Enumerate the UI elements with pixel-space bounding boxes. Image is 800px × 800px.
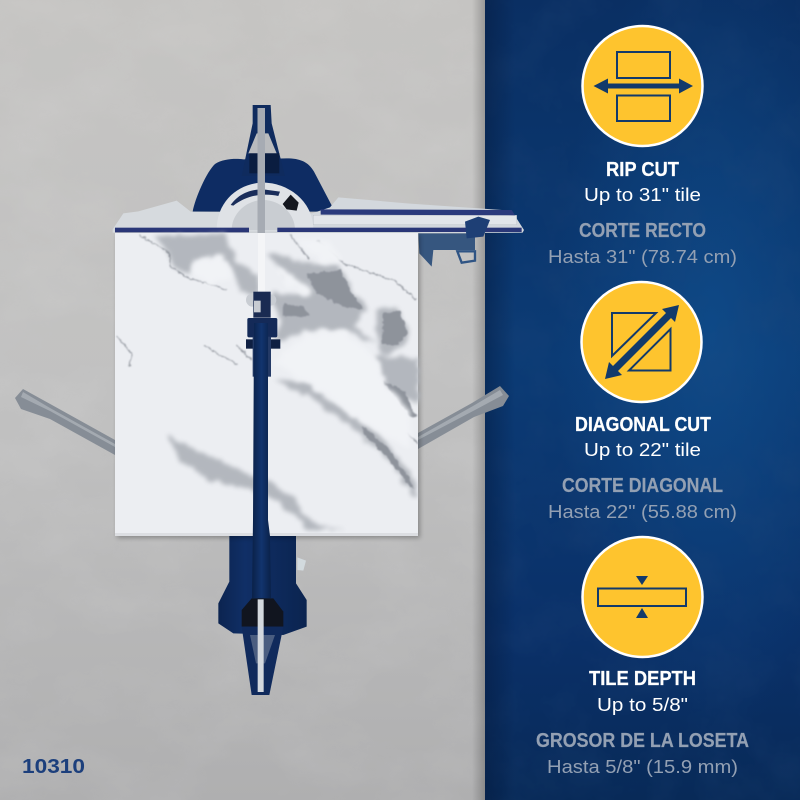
saw: front base (218, 535, 307, 695)
text: diagonal cut: Up to 22" tile (584, 440, 701, 460)
saw: central blade guide (258, 108, 265, 293)
front: navy body (218, 535, 307, 635)
tile: marble veining (117, 235, 418, 532)
text: tile depth: GROSOR DE LA LOSETA (536, 730, 749, 752)
text: tile depth: TILE DEPTH (589, 668, 696, 690)
front: blade strip (258, 599, 264, 692)
text: rip cut: Hasta 31" (78.74 cm) (548, 247, 737, 267)
rear: fence rail (313, 215, 517, 225)
rear: locking knob (283, 195, 299, 211)
text: rip cut (548, 159, 737, 267)
rear: right table wing (310, 197, 524, 233)
tile: marble slab (115, 233, 420, 538)
rear: fence stop bracket (418, 217, 490, 267)
icon: rip cut (582, 26, 702, 146)
text: rip cut: Up to 31" tile (584, 185, 701, 205)
saw: cutting head (246, 292, 280, 377)
front: black block (242, 598, 283, 627)
front: side tab (297, 557, 306, 571)
background: blue panel (485, 0, 800, 800)
text: diagonal cut: Hasta 22" (55.88 cm) (548, 502, 737, 522)
text: diagonal cut (548, 414, 737, 522)
handle: right lever (418, 386, 509, 449)
handle: left lever (15, 389, 115, 455)
rear: top blue scale (321, 209, 515, 215)
rear: A-frame bracket (242, 105, 285, 176)
rear: left table wing (113, 201, 313, 233)
background: concrete wall (0, 0, 485, 800)
text: tile depth (536, 668, 749, 777)
text: diagonal cut: CORTE DIAGONAL (562, 475, 723, 497)
rear: protractor dial (217, 183, 313, 230)
rear: right blue scale (277, 228, 522, 232)
text: tile depth: Up to 5/8" (597, 695, 688, 715)
icon: diagonal cut (582, 282, 702, 402)
front: tail bracket (242, 627, 283, 695)
rear: navy housing (193, 158, 332, 212)
text: rip cut: RIP CUT (606, 159, 679, 181)
saw: main arm (252, 323, 271, 598)
rear: left blue scale (115, 228, 249, 232)
icon: tile depth (582, 537, 702, 657)
saw: rear assembly (113, 105, 524, 267)
text: rip cut: CORTE RECTO (579, 220, 706, 242)
text: tile depth: Hasta 5/8" (15.9 mm) (547, 757, 738, 777)
text: diagonal cut: DIAGONAL CUT (575, 414, 711, 436)
model number: 10310 (22, 756, 85, 778)
